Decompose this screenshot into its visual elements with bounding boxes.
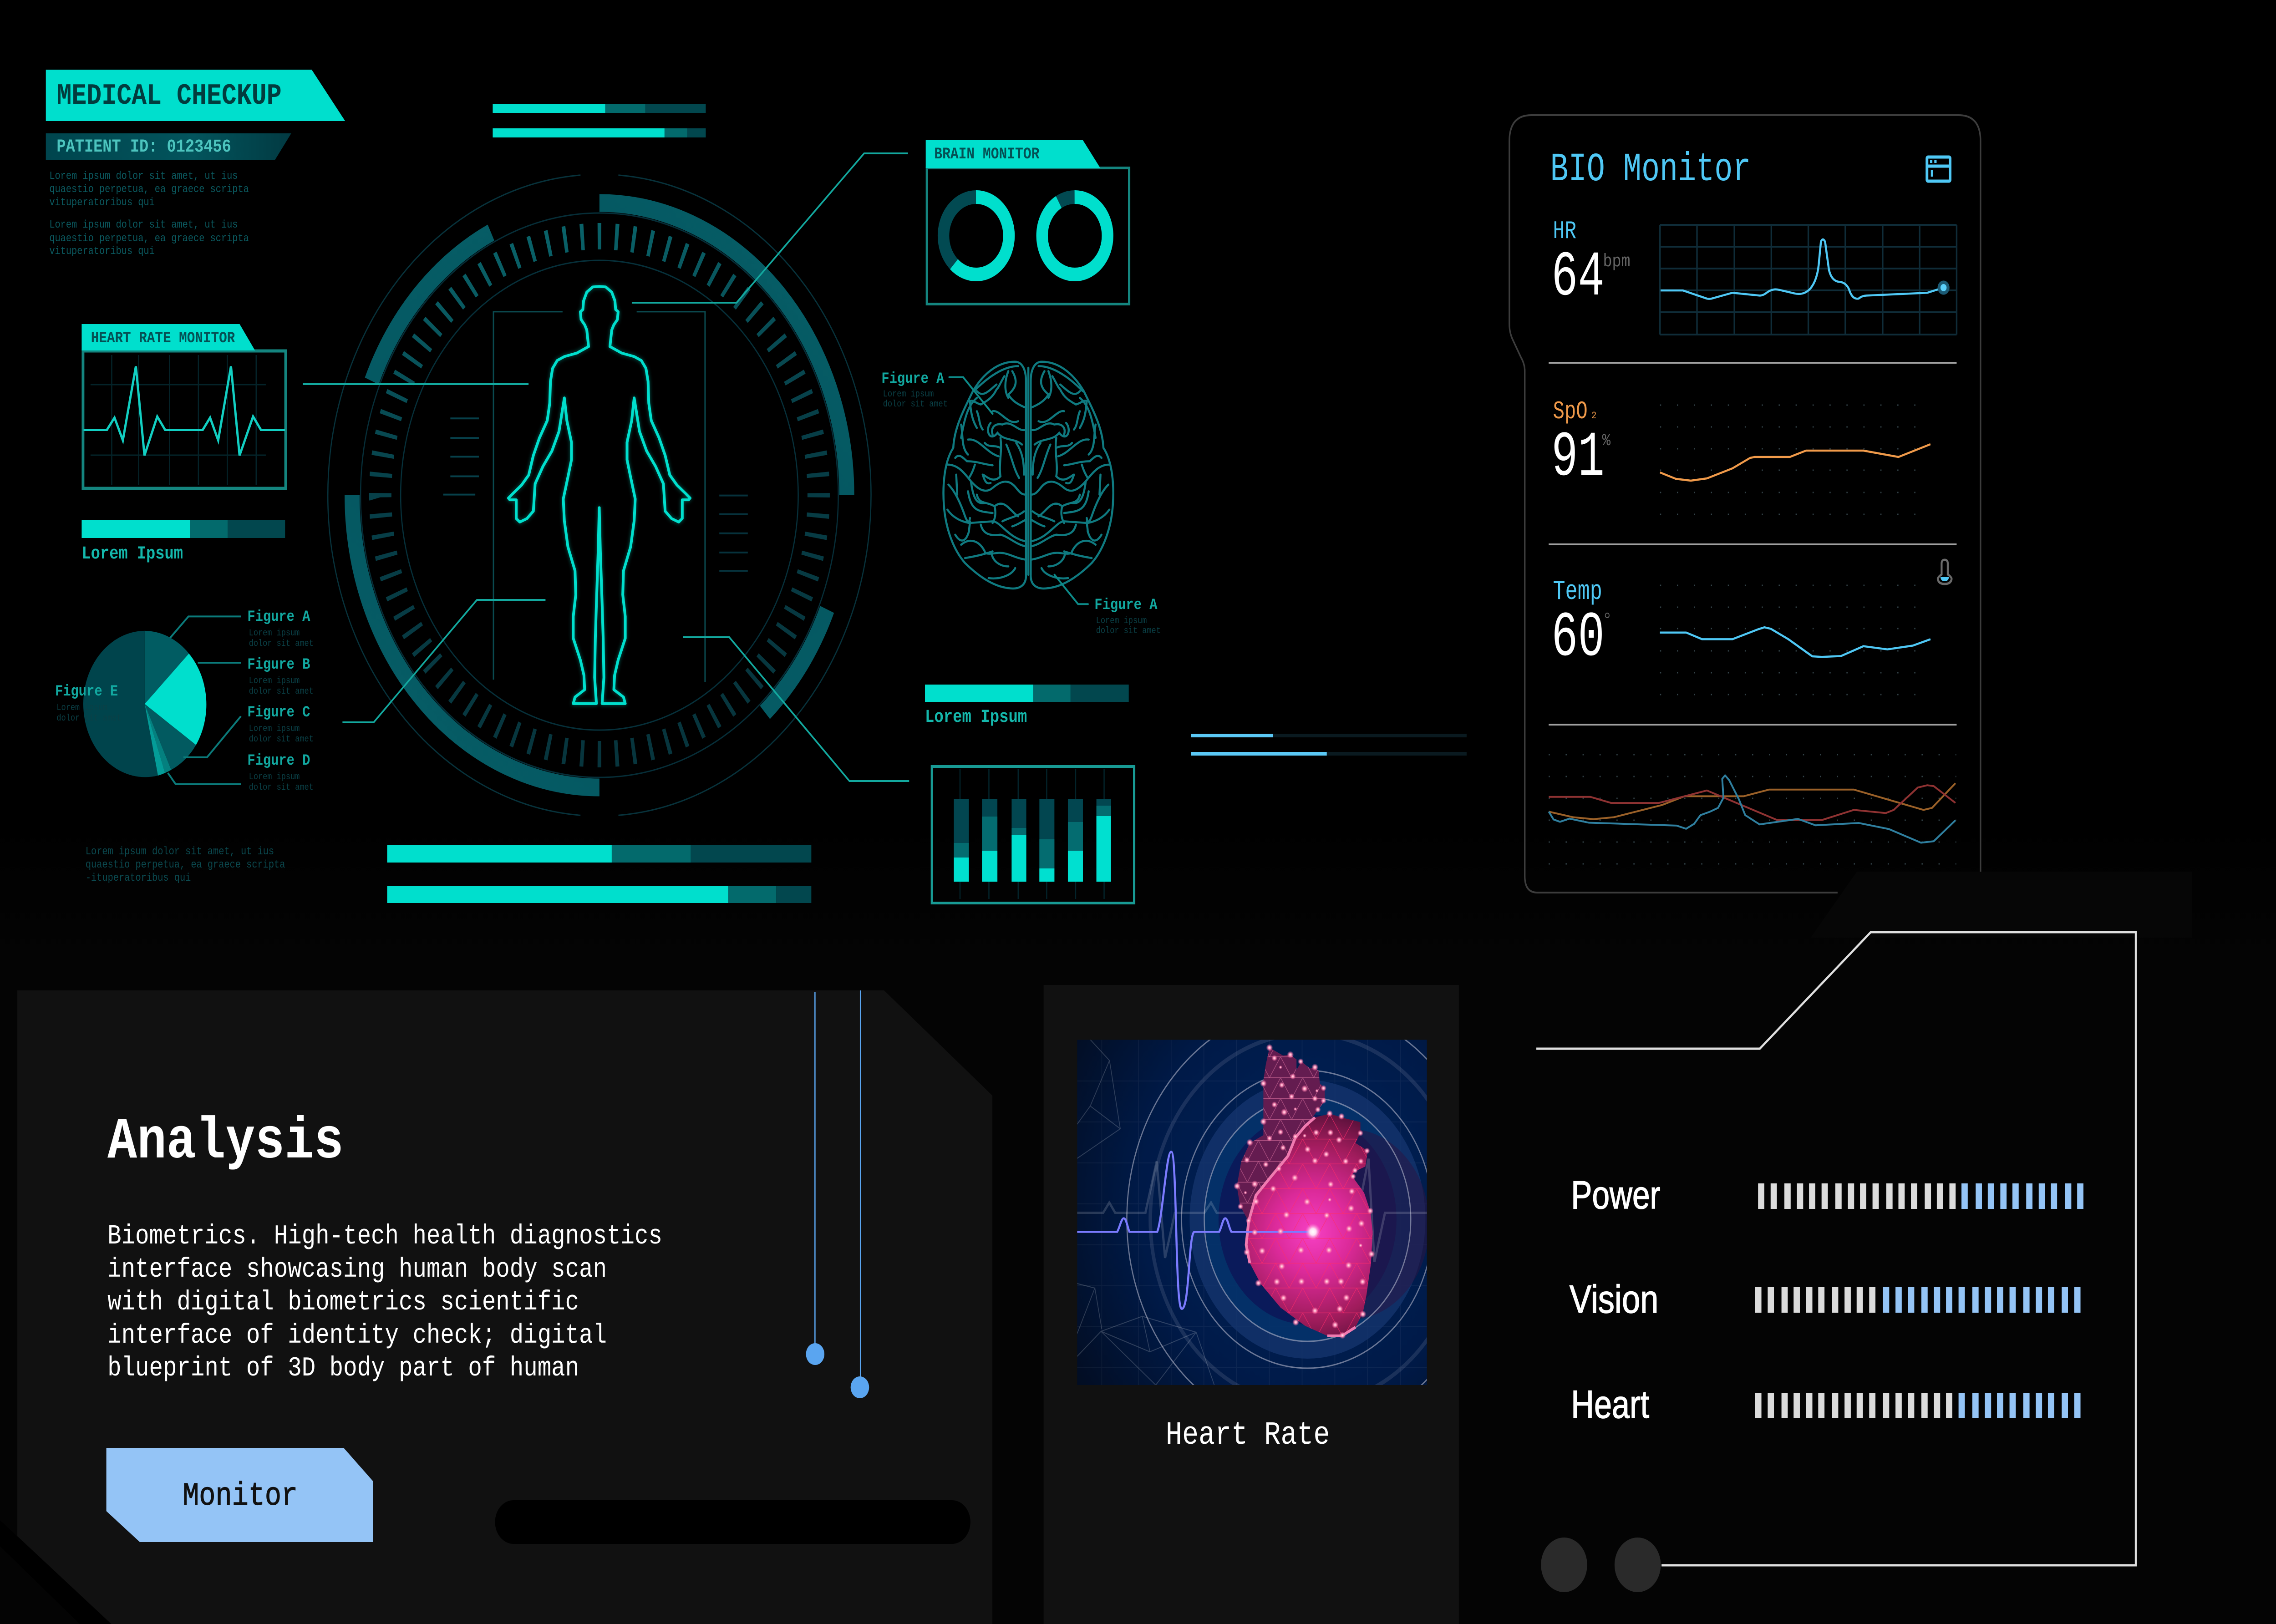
image discs xyxy=(1189,1080,1425,1359)
bottom progress bars xyxy=(387,845,811,903)
panel outline xyxy=(1509,115,1981,893)
patient id bar: PATIENT ID: 0123456 xyxy=(56,137,231,157)
heart illustration xyxy=(1077,1040,1427,1385)
spo2 readout: 2 xyxy=(1591,411,1596,422)
progress bar right xyxy=(925,685,1129,702)
brain labels: dolor sit amet xyxy=(1096,626,1161,636)
hr chart xyxy=(1660,225,1956,335)
patient id bar xyxy=(46,133,291,160)
heart rate tab: HEART RATE MONITOR xyxy=(91,329,235,347)
vision row xyxy=(1570,1277,2081,1321)
divider 1 xyxy=(1549,362,1956,364)
heart core glow xyxy=(1305,1223,1321,1240)
purple ecg trace xyxy=(1077,1152,1312,1309)
image network lines xyxy=(1077,1040,1214,1385)
bars mid xyxy=(954,806,1111,882)
brain illustration xyxy=(944,362,1113,604)
heading: analysis: Analysis xyxy=(107,1109,344,1175)
pie labels: Lorem ipsum xyxy=(249,628,300,638)
bottom lorem text: Lorem ipsum dolor sit amet, ut ius xyxy=(86,845,274,858)
pie labels: Lorem ipsum xyxy=(249,676,300,686)
body scan gauge xyxy=(275,112,924,878)
intro lorem text xyxy=(49,169,249,258)
faint ecg xyxy=(1077,1159,1427,1262)
icon: thermometer xyxy=(1938,560,1951,584)
pie labels: Lorem ipsum xyxy=(56,703,107,713)
bottom lorem text xyxy=(86,845,285,884)
temp readout: 60 xyxy=(1551,602,1605,674)
heart row xyxy=(1571,1382,2081,1426)
intro lorem text: Lorem ipsum dolor sit amet, ut ius xyxy=(49,169,238,183)
pie labels: Lorem ipsum xyxy=(249,724,300,734)
title banner: medical checkup xyxy=(46,70,345,121)
heart rate caption: Heart Rate xyxy=(1166,1417,1330,1454)
divider 3 xyxy=(1549,724,1956,726)
divider 2 xyxy=(1549,543,1956,545)
human body outline xyxy=(508,286,690,704)
callout lines xyxy=(303,153,909,781)
brain labels xyxy=(881,370,1161,636)
spo2 readout: SpO xyxy=(1553,397,1588,426)
pie labels: dolor sit amet xyxy=(56,713,122,723)
spo2 readout: 91 xyxy=(1551,421,1605,494)
temp chart xyxy=(1660,585,1931,695)
heart row: Heart xyxy=(1571,1382,1649,1426)
power row: Power xyxy=(1571,1173,1661,1217)
body text xyxy=(107,1221,662,1384)
pie labels: dolor sit amet xyxy=(249,639,314,649)
donut 2 xyxy=(1042,197,1108,274)
monitor button: Monitor xyxy=(183,1478,298,1515)
image grid xyxy=(1077,1040,1427,1385)
brain pointers xyxy=(950,377,1088,604)
body text: with digital biometrics scientific xyxy=(107,1287,579,1318)
donut 1 xyxy=(944,197,1009,274)
thick arcs xyxy=(275,112,924,878)
pie labels: Figure A xyxy=(247,609,310,626)
intro lorem text: Lorem ipsum dolor sit amet, ut ius xyxy=(49,218,238,231)
pie labels: Lorem ipsum xyxy=(249,772,300,782)
bottom lorem text: -ituperatoribus qui xyxy=(86,871,191,884)
panel: heart rate monitor xyxy=(81,324,286,488)
top progress bars xyxy=(493,104,706,137)
panel: bio monitor xyxy=(1509,115,1981,893)
intro lorem text: quaestio perpetua, ea graece scripta xyxy=(49,183,249,196)
progress bar left xyxy=(81,520,285,538)
body brackets xyxy=(443,312,748,682)
panel: analysis xyxy=(17,990,992,1624)
vision row: Vision xyxy=(1570,1277,1658,1321)
brain labels: Lorem ipsum xyxy=(1096,616,1147,626)
brain monitor tab: BRAIN MONITOR xyxy=(934,145,1040,163)
hr readout: 64 xyxy=(1551,241,1605,314)
heart ventricle xyxy=(1246,1114,1373,1336)
blue progress bars xyxy=(1191,734,1467,756)
brain labels: Figure A xyxy=(881,370,945,388)
body text: blueprint of 3D body part of human xyxy=(107,1353,579,1384)
title banner: medical checkup: MEDICAL CHECKUP xyxy=(56,80,282,113)
radial ticks xyxy=(378,234,820,756)
body text: interface of identity check; digital xyxy=(107,1320,607,1351)
temp readout: Temp xyxy=(1553,576,1602,607)
hr readout: HR xyxy=(1553,217,1576,246)
body text: Biometrics. High-tech health diagnostics xyxy=(107,1221,662,1252)
bottom lorem text: quaestio perpetua, ea graece scripta xyxy=(86,858,285,871)
pie labels: dolor sit amet xyxy=(249,782,314,792)
lower background band xyxy=(0,819,2276,1624)
spo2 chart xyxy=(1660,405,1931,514)
brain labels: Lorem ipsum xyxy=(883,389,934,399)
panel corner overlay xyxy=(1811,872,2192,938)
label: lorem ipsum left: Lorem Ipsum xyxy=(81,544,183,564)
pill slot xyxy=(495,1500,970,1544)
heart nodes xyxy=(1234,1044,1375,1339)
pie labels: Figure D xyxy=(247,752,310,770)
panel: heart rate xyxy=(1044,985,1488,1624)
pie labels: Figure C xyxy=(247,704,310,721)
combined chart xyxy=(1549,755,1956,864)
image rings xyxy=(1126,1040,1427,1385)
intro lorem text: quaestio perpetua, ea graece scripta xyxy=(49,232,249,245)
temp readout xyxy=(1551,576,1609,674)
brain labels: Figure A xyxy=(1094,597,1158,614)
label: lorem ipsum right: Lorem Ipsum xyxy=(925,707,1027,728)
intro lorem text: vituperatoribus qui xyxy=(49,244,155,258)
panel: bar chart xyxy=(932,766,1134,903)
intro lorem text: vituperatoribus qui xyxy=(49,196,155,209)
body text: interface showcasing human body scan xyxy=(107,1254,607,1285)
pie labels xyxy=(55,609,314,792)
bio title: BIO Monitor xyxy=(1550,147,1751,193)
heart atria xyxy=(1237,1048,1325,1221)
brain labels: dolor sit amet xyxy=(883,399,948,409)
heart rate tab xyxy=(81,324,255,350)
pie leader lines xyxy=(168,616,241,784)
spo2 readout: % xyxy=(1602,432,1611,451)
bottom-left dark strip xyxy=(0,1520,112,1624)
bars bright xyxy=(954,816,1111,882)
pie labels: Figure E xyxy=(55,683,118,700)
round indicators xyxy=(1541,1538,1661,1592)
hr readout: bpm xyxy=(1603,252,1631,272)
pie chart xyxy=(83,616,241,784)
hr readout xyxy=(1551,217,1631,314)
icon: window xyxy=(1927,157,1950,181)
bars dark xyxy=(954,799,1111,882)
brain monitor tab xyxy=(926,140,1100,168)
panel: brain monitor xyxy=(926,140,1129,304)
panel: stats frame xyxy=(1536,932,2136,1592)
ecg trace xyxy=(84,366,285,456)
monitor button xyxy=(107,1448,373,1542)
pie labels: dolor sit amet xyxy=(249,686,314,696)
pie labels: Figure B xyxy=(247,656,310,674)
pie labels: dolor sit amet xyxy=(249,734,314,744)
power row xyxy=(1571,1173,2083,1217)
blue pin lines xyxy=(806,990,869,1398)
